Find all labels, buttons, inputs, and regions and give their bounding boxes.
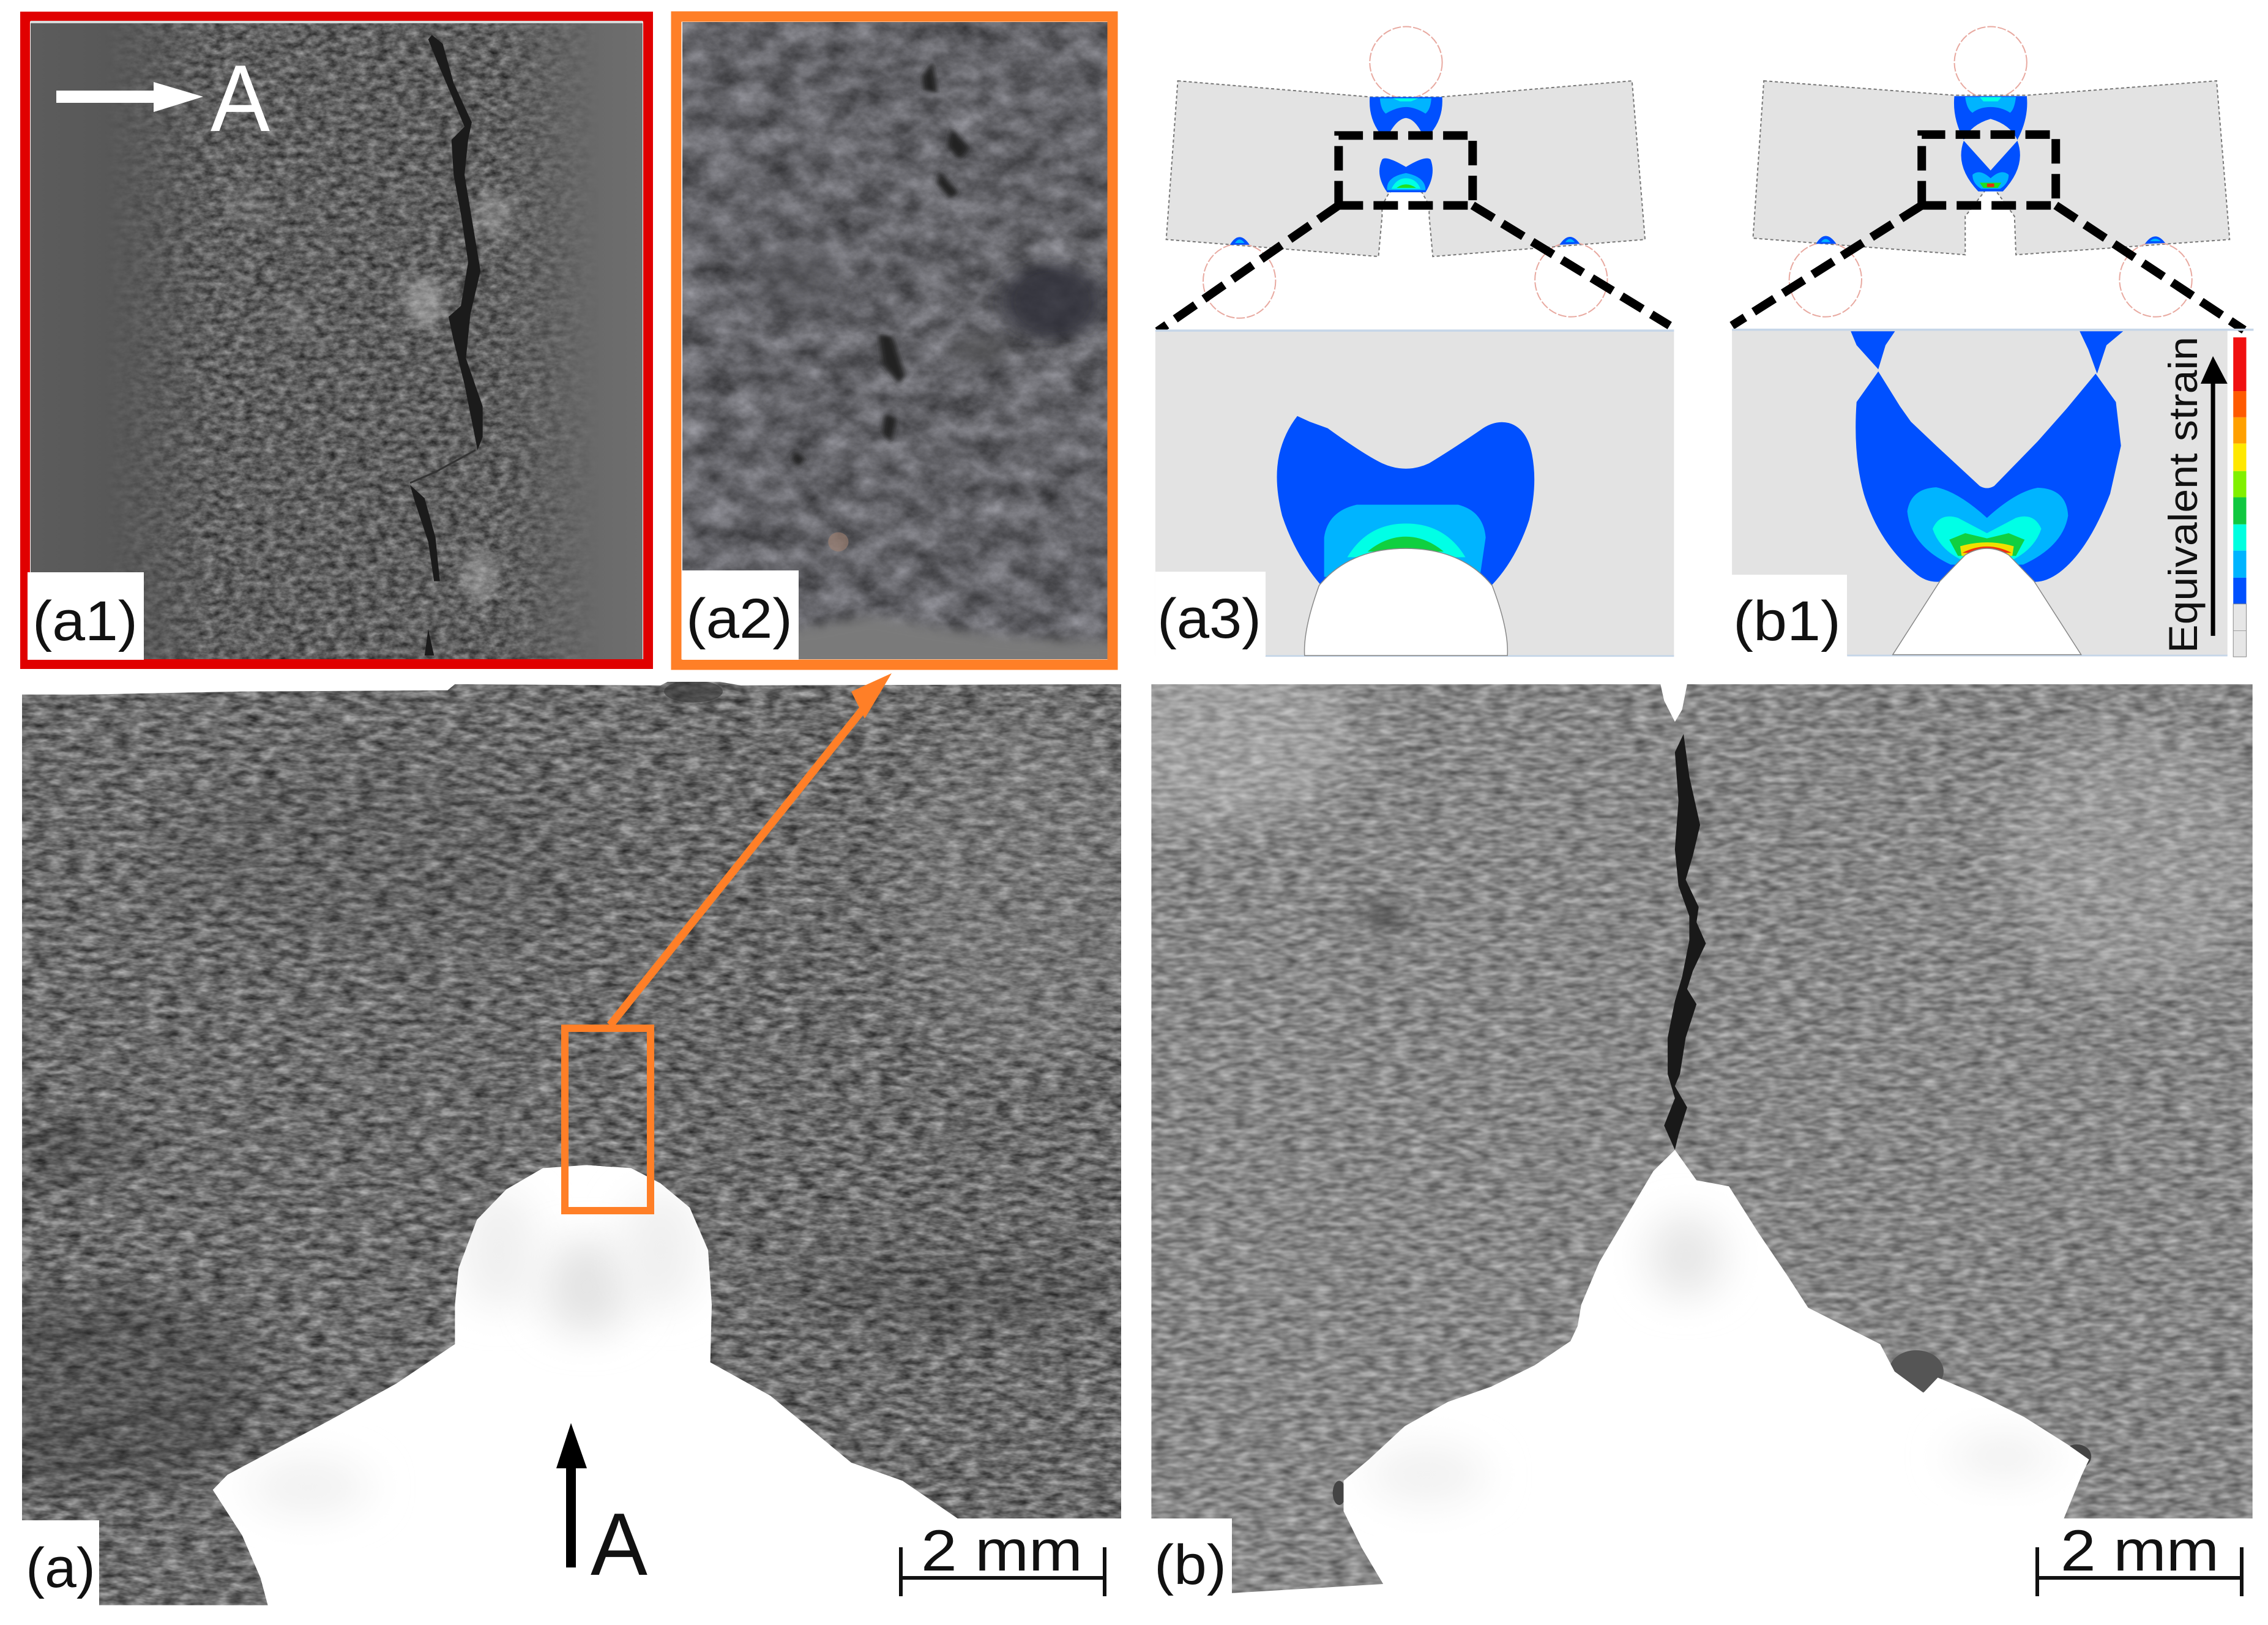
panel b1: strain zoom for V notch [1732,329,2253,657]
scale bar b: 2 mm [2061,1519,2219,1583]
panel a: macro photo of notched specimen [0,679,1159,1608]
label a3: (a3) [1157,588,1261,650]
white arrow A in a1 [56,45,270,151]
dashed zoom box a [1157,135,1669,331]
rollers a [1203,27,1608,318]
plate b [1753,81,2229,255]
rollers b [1789,27,2192,317]
panel b: macro photo of V notch specimen with crack [1066,643,2262,1596]
scale bar a [901,1519,1105,1596]
load arrow A [556,1423,647,1594]
white arrow A in a1: A [211,45,270,151]
strain colour scale [2233,337,2247,657]
specimen a material [0,679,1159,1608]
label b1: (b1) [1733,590,1841,652]
plate a [1166,81,1645,256]
axis label: equivalent strain: Equivalent strain [2160,337,2206,653]
cracks in a2 [791,61,969,468]
panel: FE model a overview [1157,27,1669,331]
panel a2: orange framed magnified photo [675,17,1117,668]
load arrow A: A [591,1495,647,1594]
strain notch a [1379,159,1433,192]
contact spots b [1816,236,2165,244]
strain top a [1370,97,1442,133]
panel a3: strain zoom for round notch [1155,329,1674,657]
label a [22,1520,99,1606]
contact spots a [1230,237,1580,245]
label b1 [1732,575,1847,656]
label a: (a) [26,1537,95,1599]
scale bar b [2037,1519,2242,1596]
scale bar a: 2 mm [921,1519,1083,1583]
label b: (b) [1154,1534,1226,1596]
strain field b [1954,96,2027,192]
panel: FE model b overview [1732,27,2244,330]
label a1: (a1) [32,590,138,652]
label a2: (a2) [686,588,793,650]
orange selection box on panel a [565,1028,651,1211]
label a3 [1155,572,1266,656]
crack b [1664,734,1706,1150]
label b [1151,1519,1232,1596]
crack in a1 [410,35,483,656]
label a2 [682,570,799,660]
axis arrow [2201,356,2228,636]
dashed zoom box b [1732,135,2244,330]
orange arrow to panel a2 [610,673,892,1025]
panel a1: red framed crack surface photo [25,17,648,664]
label a1 [28,572,144,660]
specimen b material [1066,643,2262,1596]
